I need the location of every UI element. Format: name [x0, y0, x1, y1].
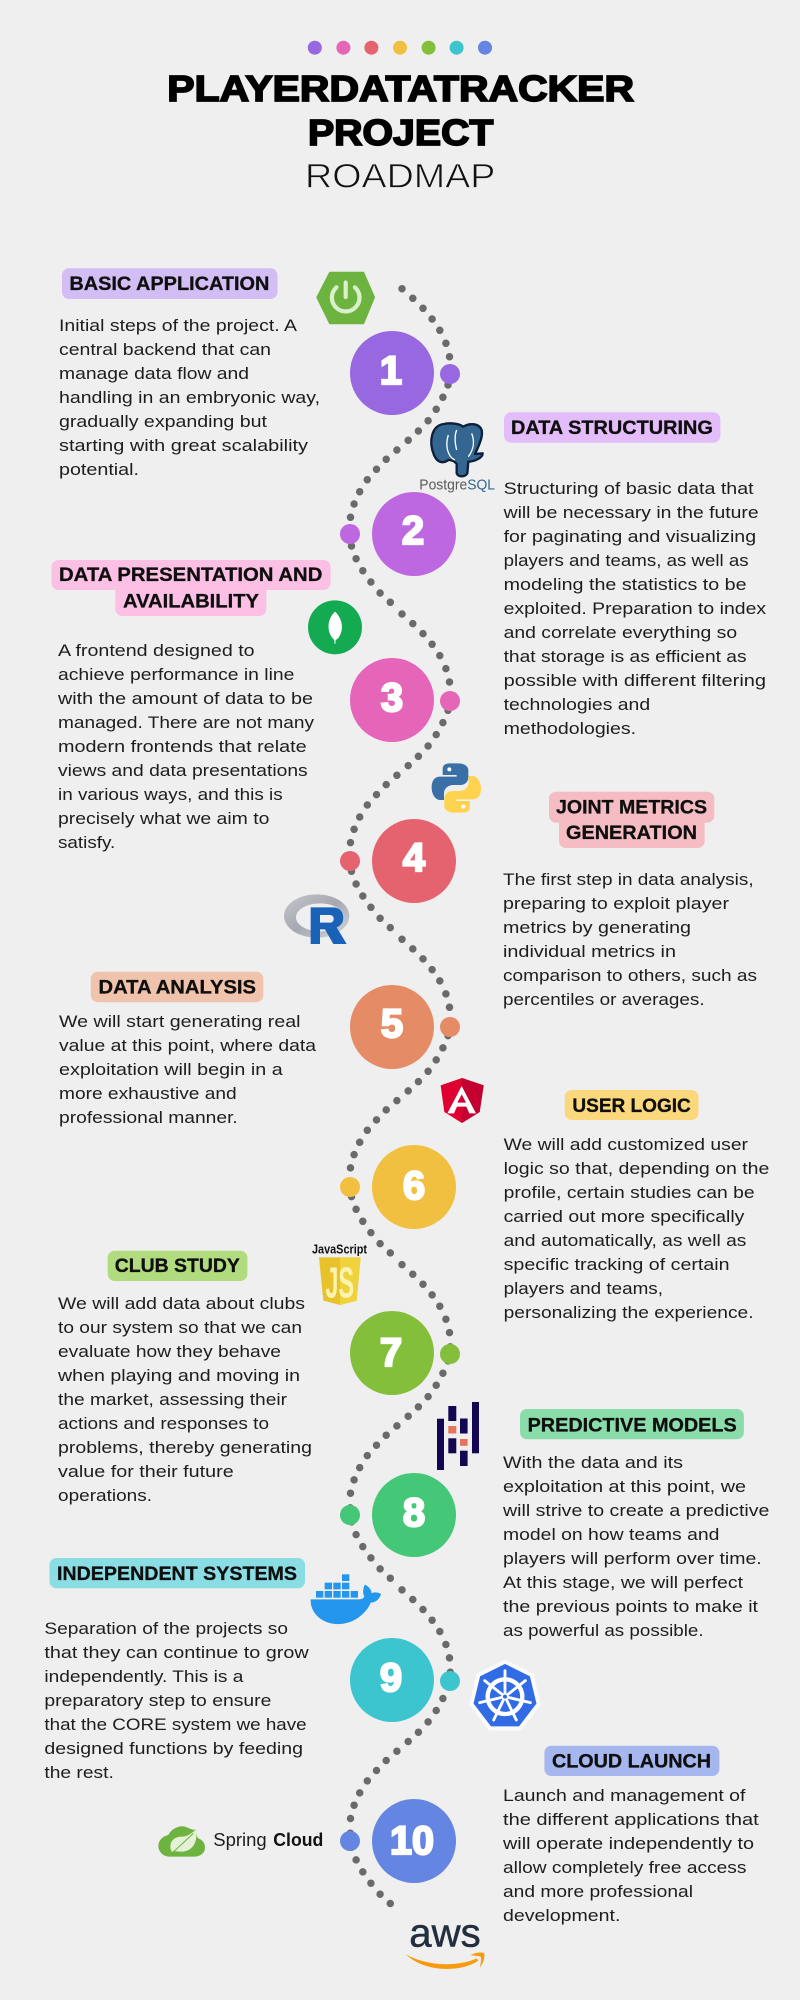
text: club study: the market, assessing their: [58, 1390, 287, 1409]
icon: aws logo: [406, 1912, 484, 1969]
icon: angular shield: [441, 1078, 484, 1123]
text: data presentation and availability: achieve performance in line: [58, 665, 294, 684]
text: data structuring: methodologies.: [504, 719, 636, 738]
step 10 marker: [340, 1799, 456, 1883]
heading: joint metrics generation: JOINT METRICS: [556, 797, 707, 818]
step 3 marker: 3: [381, 676, 403, 720]
text: data structuring: and correlate everything so: [504, 623, 737, 642]
text: data structuring: players and teams, as well as: [504, 551, 749, 570]
text: data presentation and availability: in various ways, and this is: [58, 785, 283, 804]
text: club study: actions and responses to: [58, 1414, 269, 1433]
heading: predictive models: PREDICTIVE MODELS: [528, 1415, 737, 1436]
panel: predictive models: [502, 1409, 769, 1640]
step 9 marker: [350, 1638, 460, 1722]
text: basic application: Initial steps of the project. A: [59, 316, 298, 335]
icon: javascript shield: JS: [325, 1259, 354, 1307]
heading: club study: CLUB STUDY: [115, 1256, 240, 1277]
panel: data presentation and availability: [52, 560, 331, 852]
step 8 marker: [340, 1473, 456, 1557]
text: independent systems: Separation of the projects so: [44, 1619, 288, 1638]
text: data structuring: for paginating and visualizing: [504, 527, 756, 546]
heading: predictive models: [520, 1409, 744, 1439]
text: data analysis: value at this point, where data: [59, 1036, 317, 1055]
heading: data structuring: DATA STRUCTURING: [511, 418, 713, 439]
title: PLAYERDATATRACKER: [167, 68, 634, 109]
icon: spring cloud logo: Spring: [213, 1829, 267, 1850]
heading: joint metrics generation: GENERATION: [566, 823, 697, 844]
text: club study: when playing and moving in: [57, 1366, 300, 1385]
header colour dots: [308, 41, 492, 55]
text: user logic: [504, 1135, 769, 1322]
text: cloud launch: and more professional: [503, 1882, 693, 1901]
text: data structuring: technologies and: [504, 695, 650, 714]
text: data structuring: modeling the statistics to be: [504, 575, 747, 594]
text: cloud launch: allow completely free access: [503, 1858, 746, 1877]
title: PROJECT: [308, 112, 493, 153]
text: club study: [57, 1294, 312, 1505]
text: predictive models: as powerful as possible.: [503, 1621, 704, 1640]
text: club study: problems, thereby generating: [58, 1438, 312, 1457]
text: club study: We will add data about clubs: [58, 1294, 305, 1313]
heading: data analysis: [91, 972, 263, 1002]
step 5 marker: 5: [381, 1002, 403, 1046]
text: data structuring: possible with different filtering: [504, 671, 766, 690]
heading: data presentation and availability: DATA PRESENTATION AND: [59, 565, 322, 586]
text: data structuring: exploited. Preparation to index: [504, 599, 767, 618]
heading: club study: [108, 1251, 247, 1281]
icon: spring boot hexagon: [317, 273, 374, 323]
text: data structuring: that storage is as efficient as: [504, 647, 747, 666]
icon: javascript shield: [312, 1242, 368, 1307]
text: basic application: handling in an embryonic way,: [59, 388, 320, 407]
icon: javascript shield: JavaScript: [312, 1242, 368, 1256]
icon: spring cloud logo: Cloud: [273, 1829, 323, 1850]
step 8 marker: 8: [403, 1491, 425, 1535]
text: user logic: personalizing the experience.: [504, 1303, 754, 1322]
icon: postgresql: PostgreSQL: [419, 477, 495, 493]
text: club study: to our system so that we can: [58, 1318, 302, 1337]
heading: data analysis: DATA ANALYSIS: [98, 977, 256, 998]
icon: spring cloud logo: [158, 1826, 323, 1857]
step 3 marker: [350, 658, 460, 742]
text: independent systems: that the CORE system we have: [44, 1715, 307, 1734]
text: cloud launch: development.: [503, 1906, 620, 1925]
text: independent systems: [44, 1619, 310, 1782]
panel: independent systems: [44, 1558, 310, 1782]
text: joint metrics generation: metrics by generating: [503, 918, 691, 937]
text: basic application: starting with great scalability: [59, 436, 309, 455]
text: data presentation and availability: managed. There are not many: [58, 713, 315, 732]
icon: mongodb leaf: [308, 600, 362, 654]
heading: cloud launch: [544, 1746, 719, 1776]
text: data analysis: professional manner.: [59, 1108, 238, 1127]
dotted road path: [350, 289, 450, 1904]
heading: basic application: BASIC APPLICATION: [69, 274, 269, 295]
text: independent systems: preparatory step to ensure: [44, 1691, 271, 1710]
step 2 marker: [340, 492, 456, 576]
text: independent systems: that they can continue to grow: [44, 1643, 310, 1662]
text: data analysis: We will start generating real: [59, 1012, 300, 1031]
step 7 marker: [350, 1311, 460, 1395]
text: predictive models: model on how teams and: [503, 1525, 719, 1544]
text: data presentation and availability: precisely what we aim to: [58, 809, 269, 828]
icon: docker whale: [311, 1574, 381, 1624]
text: predictive models: the previous points to make it: [503, 1597, 758, 1616]
text: user logic: profile, certain studies can be: [504, 1183, 755, 1202]
heading: data presentation and availability: [52, 560, 331, 616]
text: data presentation and availability: satisfy.: [58, 833, 115, 852]
heading: user logic: [565, 1090, 698, 1120]
text: independent systems: designed functions by feeding: [44, 1739, 303, 1758]
text: data analysis: [59, 1012, 317, 1127]
text: data presentation and availability: A frontend designed to: [58, 641, 255, 660]
text: joint metrics generation: preparing to exploit player: [503, 894, 729, 913]
text: joint metrics generation: comparison to others, such as: [503, 966, 757, 985]
text: data presentation and availability: with the amount of data to be: [57, 689, 313, 708]
heading: joint metrics generation: [549, 792, 714, 848]
heading: data structuring: [504, 412, 720, 443]
text: data presentation and availability: [57, 641, 315, 852]
heading: independent systems: [50, 1558, 305, 1588]
text: user logic: carried out more specifically: [504, 1207, 745, 1226]
step 4 marker: [340, 819, 456, 903]
icon: aws logo: aws: [409, 1912, 481, 1956]
text: cloud launch: [502, 1786, 759, 1925]
text: cloud launch: Launch and management of: [503, 1786, 746, 1805]
step 9 marker: 9: [380, 1656, 402, 1700]
text: joint metrics generation: percentiles or averages.: [503, 990, 705, 1009]
text: independent systems: independently. This is a: [44, 1667, 244, 1686]
text: independent systems: the rest.: [44, 1763, 114, 1782]
text: basic application: gradually expanding but: [59, 412, 267, 431]
icon: kubernetes wheel: [471, 1662, 539, 1728]
text: user logic: logic so that, depending on the: [504, 1159, 769, 1178]
text: data analysis: exploitation will begin in a: [59, 1060, 283, 1079]
panel: data analysis: [59, 972, 317, 1127]
text: basic application: central backend that can: [59, 340, 271, 359]
title: [167, 68, 634, 196]
text: basic application: [59, 316, 320, 479]
step 1 marker: 1: [380, 349, 402, 393]
heading: cloud launch: CLOUD LAUNCH: [552, 1751, 711, 1772]
text: data presentation and availability: modern frontends that relate: [58, 737, 307, 756]
heading: data presentation and availability: AVAILABILITY: [123, 591, 259, 612]
text: data presentation and availability: views and data presentations: [58, 761, 308, 780]
text: data structuring: [502, 479, 767, 738]
text: predictive models: will strive to create a predictive: [502, 1501, 769, 1520]
heading: basic application: [62, 268, 278, 299]
step 5 marker: [350, 985, 460, 1069]
text: basic application: manage data flow and: [59, 364, 249, 383]
text: data structuring: will be necessary in the future: [502, 503, 759, 522]
panel: user logic: [504, 1090, 769, 1322]
text: predictive models: With the data and its: [503, 1453, 683, 1472]
text: data structuring: Structuring of basic data that: [504, 479, 754, 498]
step 1 marker: [350, 331, 460, 415]
step 6 marker: 6: [403, 1164, 425, 1208]
text: data analysis: more exhaustive and: [59, 1084, 237, 1103]
heading: user logic: USER LOGIC: [572, 1096, 691, 1117]
step 4 marker: 4: [403, 836, 426, 880]
heading: independent systems: INDEPENDENT SYSTEMS: [57, 1564, 297, 1585]
panel: cloud launch: [502, 1746, 759, 1925]
step 7 marker: 7: [380, 1331, 402, 1375]
icon: pandas: [437, 1402, 479, 1470]
text: user logic: and automatically, as well as: [504, 1231, 746, 1250]
text: cloud launch: will operate independently to: [502, 1834, 754, 1853]
text: joint metrics generation: The first step in data analysis,: [503, 870, 754, 889]
text: user logic: specific tracking of certain: [504, 1255, 730, 1274]
step 6 marker: [340, 1145, 456, 1229]
text: user logic: We will add customized user: [504, 1135, 748, 1154]
icon: python: [432, 763, 481, 813]
icon: r language: [284, 894, 349, 944]
text: predictive models: exploitation at this point, we: [503, 1477, 746, 1496]
text: joint metrics generation: [503, 870, 757, 1009]
text: joint metrics generation: individual metrics in: [503, 942, 676, 961]
text: predictive models: At this stage, we will perfect: [503, 1573, 743, 1592]
panel: basic application: [59, 268, 320, 479]
text: user logic: players and teams,: [504, 1279, 663, 1298]
step 2 marker: 2: [402, 509, 424, 553]
icon: postgresql: [419, 423, 495, 493]
text: club study: value for their future: [58, 1462, 234, 1481]
text: cloud launch: the different applications that: [503, 1810, 759, 1829]
text: predictive models: [502, 1453, 769, 1640]
title: ROADMAP: [305, 158, 495, 196]
step 10 marker: 10: [390, 1819, 434, 1863]
text: predictive models: players will perform over time.: [503, 1549, 762, 1568]
panel: data structuring: [502, 412, 767, 738]
panel: joint metrics generation: [503, 792, 757, 1009]
text: club study: evaluate how they behave: [58, 1342, 281, 1361]
text: club study: operations.: [58, 1486, 152, 1505]
panel: club study: [57, 1251, 312, 1505]
text: basic application: potential.: [59, 460, 139, 479]
